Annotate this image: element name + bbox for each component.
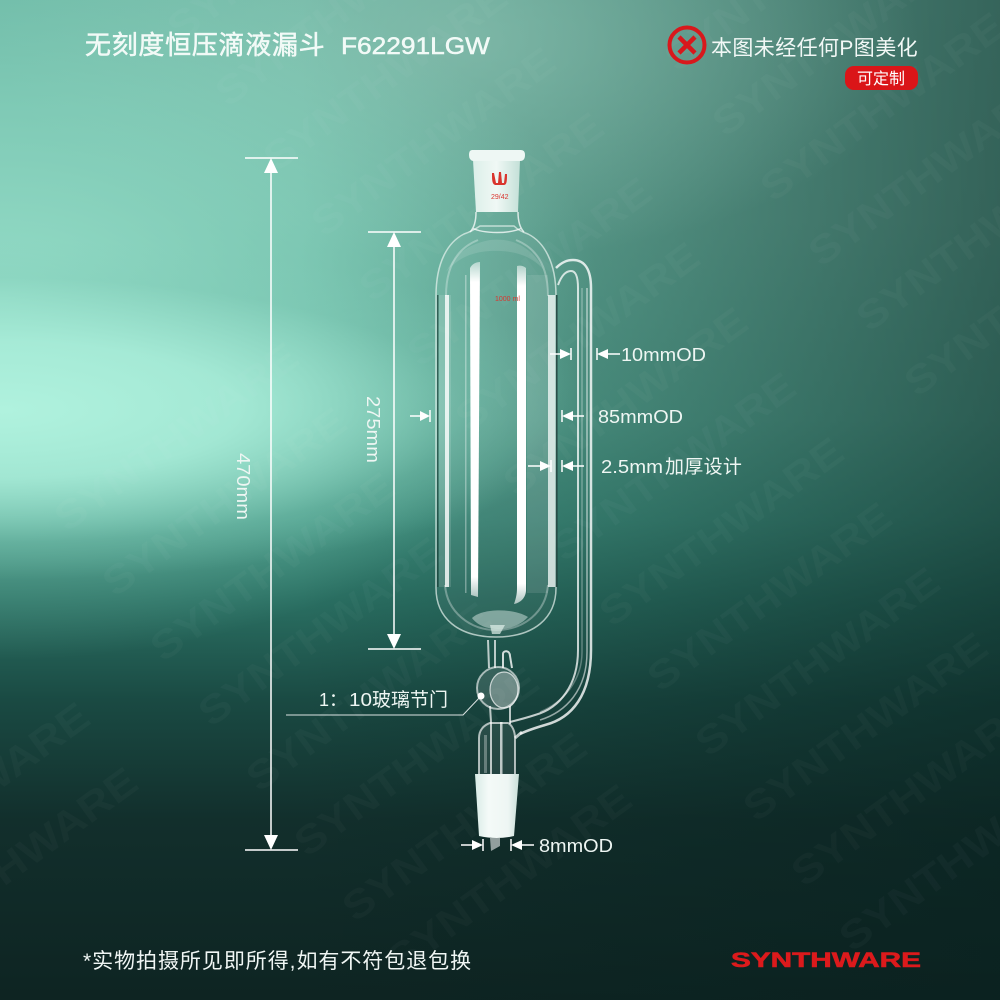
bottom curve reflections	[445, 585, 548, 630]
dimension: tip 8mmOD: 8mmOD	[539, 836, 613, 856]
logo mark	[492, 172, 507, 185]
capacity mark: 1000 ml	[495, 296, 520, 303]
top ground joint	[469, 150, 525, 212]
dimension: wall thickness 2.5mm: 2.5mm	[601, 457, 663, 477]
joint size: 29/42	[491, 194, 509, 201]
title: 无刻度恒压滴液漏斗	[85, 30, 325, 60]
text: SYNTHWARE	[735, 624, 996, 830]
text: SYNTHWARE	[399, 169, 660, 375]
dimension: wall thickness 2.5mm: 加厚设计	[665, 456, 742, 478]
badge: customizable	[845, 66, 918, 90]
text: SYNTHWARE	[238, 594, 499, 800]
stopcock	[477, 640, 519, 724]
icon: red cross circle	[670, 28, 704, 62]
text: SYNTHWARE	[379, 776, 640, 982]
title: F62291LGW	[341, 33, 490, 60]
dimension: overall height 470mm	[233, 158, 298, 850]
text: SYNTHWARE	[639, 494, 900, 700]
text: SYNTHWARE	[687, 559, 948, 765]
text: SYNTHWARE	[447, 234, 708, 440]
text: SYNTHWARE	[591, 429, 852, 635]
lower tube	[479, 722, 522, 774]
notice text: 本图未经任何P图美化	[711, 37, 918, 60]
text: SYNTHWARE	[303, 39, 564, 245]
dimension: body 85mmOD: 85mmOD	[598, 407, 683, 427]
text: SYNTHWARE	[46, 334, 307, 540]
dimension: overall height 470mm: 470mm	[233, 453, 253, 520]
title	[85, 30, 490, 60]
dimension: wall thickness 2.5mm	[528, 456, 742, 478]
text: SYNTHWARE	[351, 104, 612, 310]
side arm tube	[510, 260, 591, 734]
neck	[470, 212, 524, 232]
product: pressure-equalizing dropping funnel	[436, 150, 591, 851]
text: SYNTHWARE	[334, 724, 595, 930]
notice: no retouching	[670, 28, 918, 62]
drip tip	[490, 838, 500, 851]
funnel body	[436, 212, 558, 637]
text: SYNTHWARE	[190, 529, 451, 735]
brand logo: SYNTHWARE	[731, 949, 921, 972]
text: SYNTHWARE	[543, 364, 804, 570]
dimension: body height 275mm: 275mm	[363, 396, 383, 463]
highlight bars	[470, 262, 480, 597]
callout: 1:10 glass valve: 1：	[319, 690, 347, 710]
dimension: side tube 10mmOD: 10mmOD	[621, 345, 706, 365]
shoulder reflections	[446, 240, 548, 296]
text: SYNTHWARE	[752, 4, 1000, 210]
dimension: side tube 10mmOD	[550, 345, 706, 365]
callout: 1:10 glass valve	[286, 689, 484, 715]
glass walls	[437, 295, 438, 587]
text: SYNTHWARE	[255, 0, 516, 180]
badge: customizable: 可定制	[857, 70, 905, 88]
text: SYNTHWARE	[286, 659, 547, 865]
callout: 1:10 glass valve: 10	[349, 690, 372, 710]
text: SYNTHWARE	[94, 399, 355, 605]
dimension: body 85mmOD	[562, 407, 683, 427]
dimension: tip 8mmOD	[461, 836, 613, 856]
dimension: body diameter left arrow	[410, 410, 430, 422]
dimension: body height 275mm	[363, 232, 421, 649]
text: SYNTHWARE	[495, 299, 756, 505]
callout: 1:10 glass valve: 玻璃节门	[372, 689, 448, 711]
bottom ground joint	[475, 774, 519, 838]
footnote: *实物拍摄所见即所得,如有不符包退包换	[83, 950, 472, 973]
text: SYNTHWARE	[142, 464, 403, 670]
